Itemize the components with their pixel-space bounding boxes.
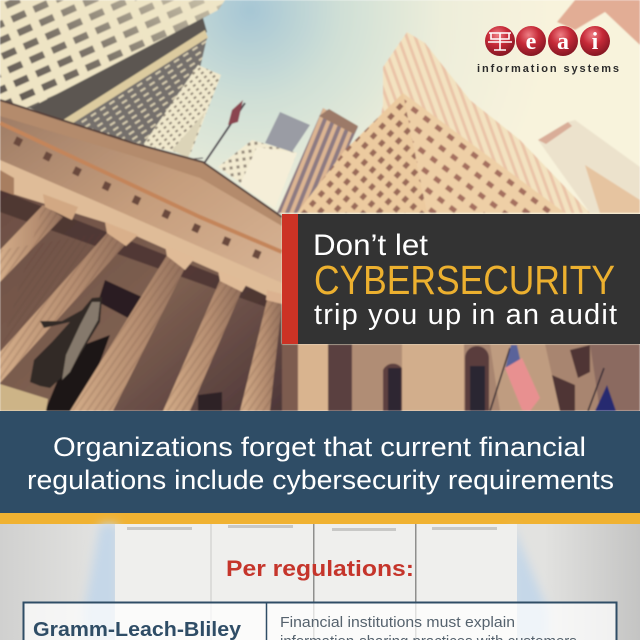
gold divider — [0, 513, 640, 524]
statue — [30, 297, 102, 388]
flags — [490, 345, 616, 411]
icon: red balls: e — [526, 29, 537, 55]
title panel — [282, 214, 640, 344]
logo: eai information systems — [477, 26, 619, 75]
red accent bar — [282, 214, 298, 344]
pedestal — [0, 384, 48, 411]
lower section background — [0, 524, 640, 640]
row description — [280, 614, 577, 640]
subtitle text: Organizations forget that current financial — [53, 432, 586, 462]
icon: red balls: i — [592, 29, 599, 55]
logo tagline: information systems — [477, 63, 619, 75]
doors and shadowed bay — [98, 280, 142, 318]
wall behind columns — [0, 170, 282, 411]
heading: per regulations: Per regulations: — [226, 556, 414, 581]
icon: red balls: a — [557, 29, 569, 55]
subtitle text: regulations include cybersecurity requirements — [27, 465, 614, 495]
hero photo: Wall Street buildings — [0, 0, 640, 411]
dark panel — [298, 214, 640, 344]
columns — [0, 170, 282, 411]
title line 3: trip you up in an audit — [314, 299, 617, 331]
lower-right facade — [282, 344, 640, 411]
row description: Financial institutions must explain — [280, 614, 515, 631]
subtitle text — [27, 432, 614, 495]
pediment — [0, 100, 282, 303]
icon: red balls — [485, 26, 610, 56]
title line 1: Don’t let — [313, 229, 429, 262]
regulations table — [24, 602, 616, 640]
subtitle band — [0, 411, 640, 513]
